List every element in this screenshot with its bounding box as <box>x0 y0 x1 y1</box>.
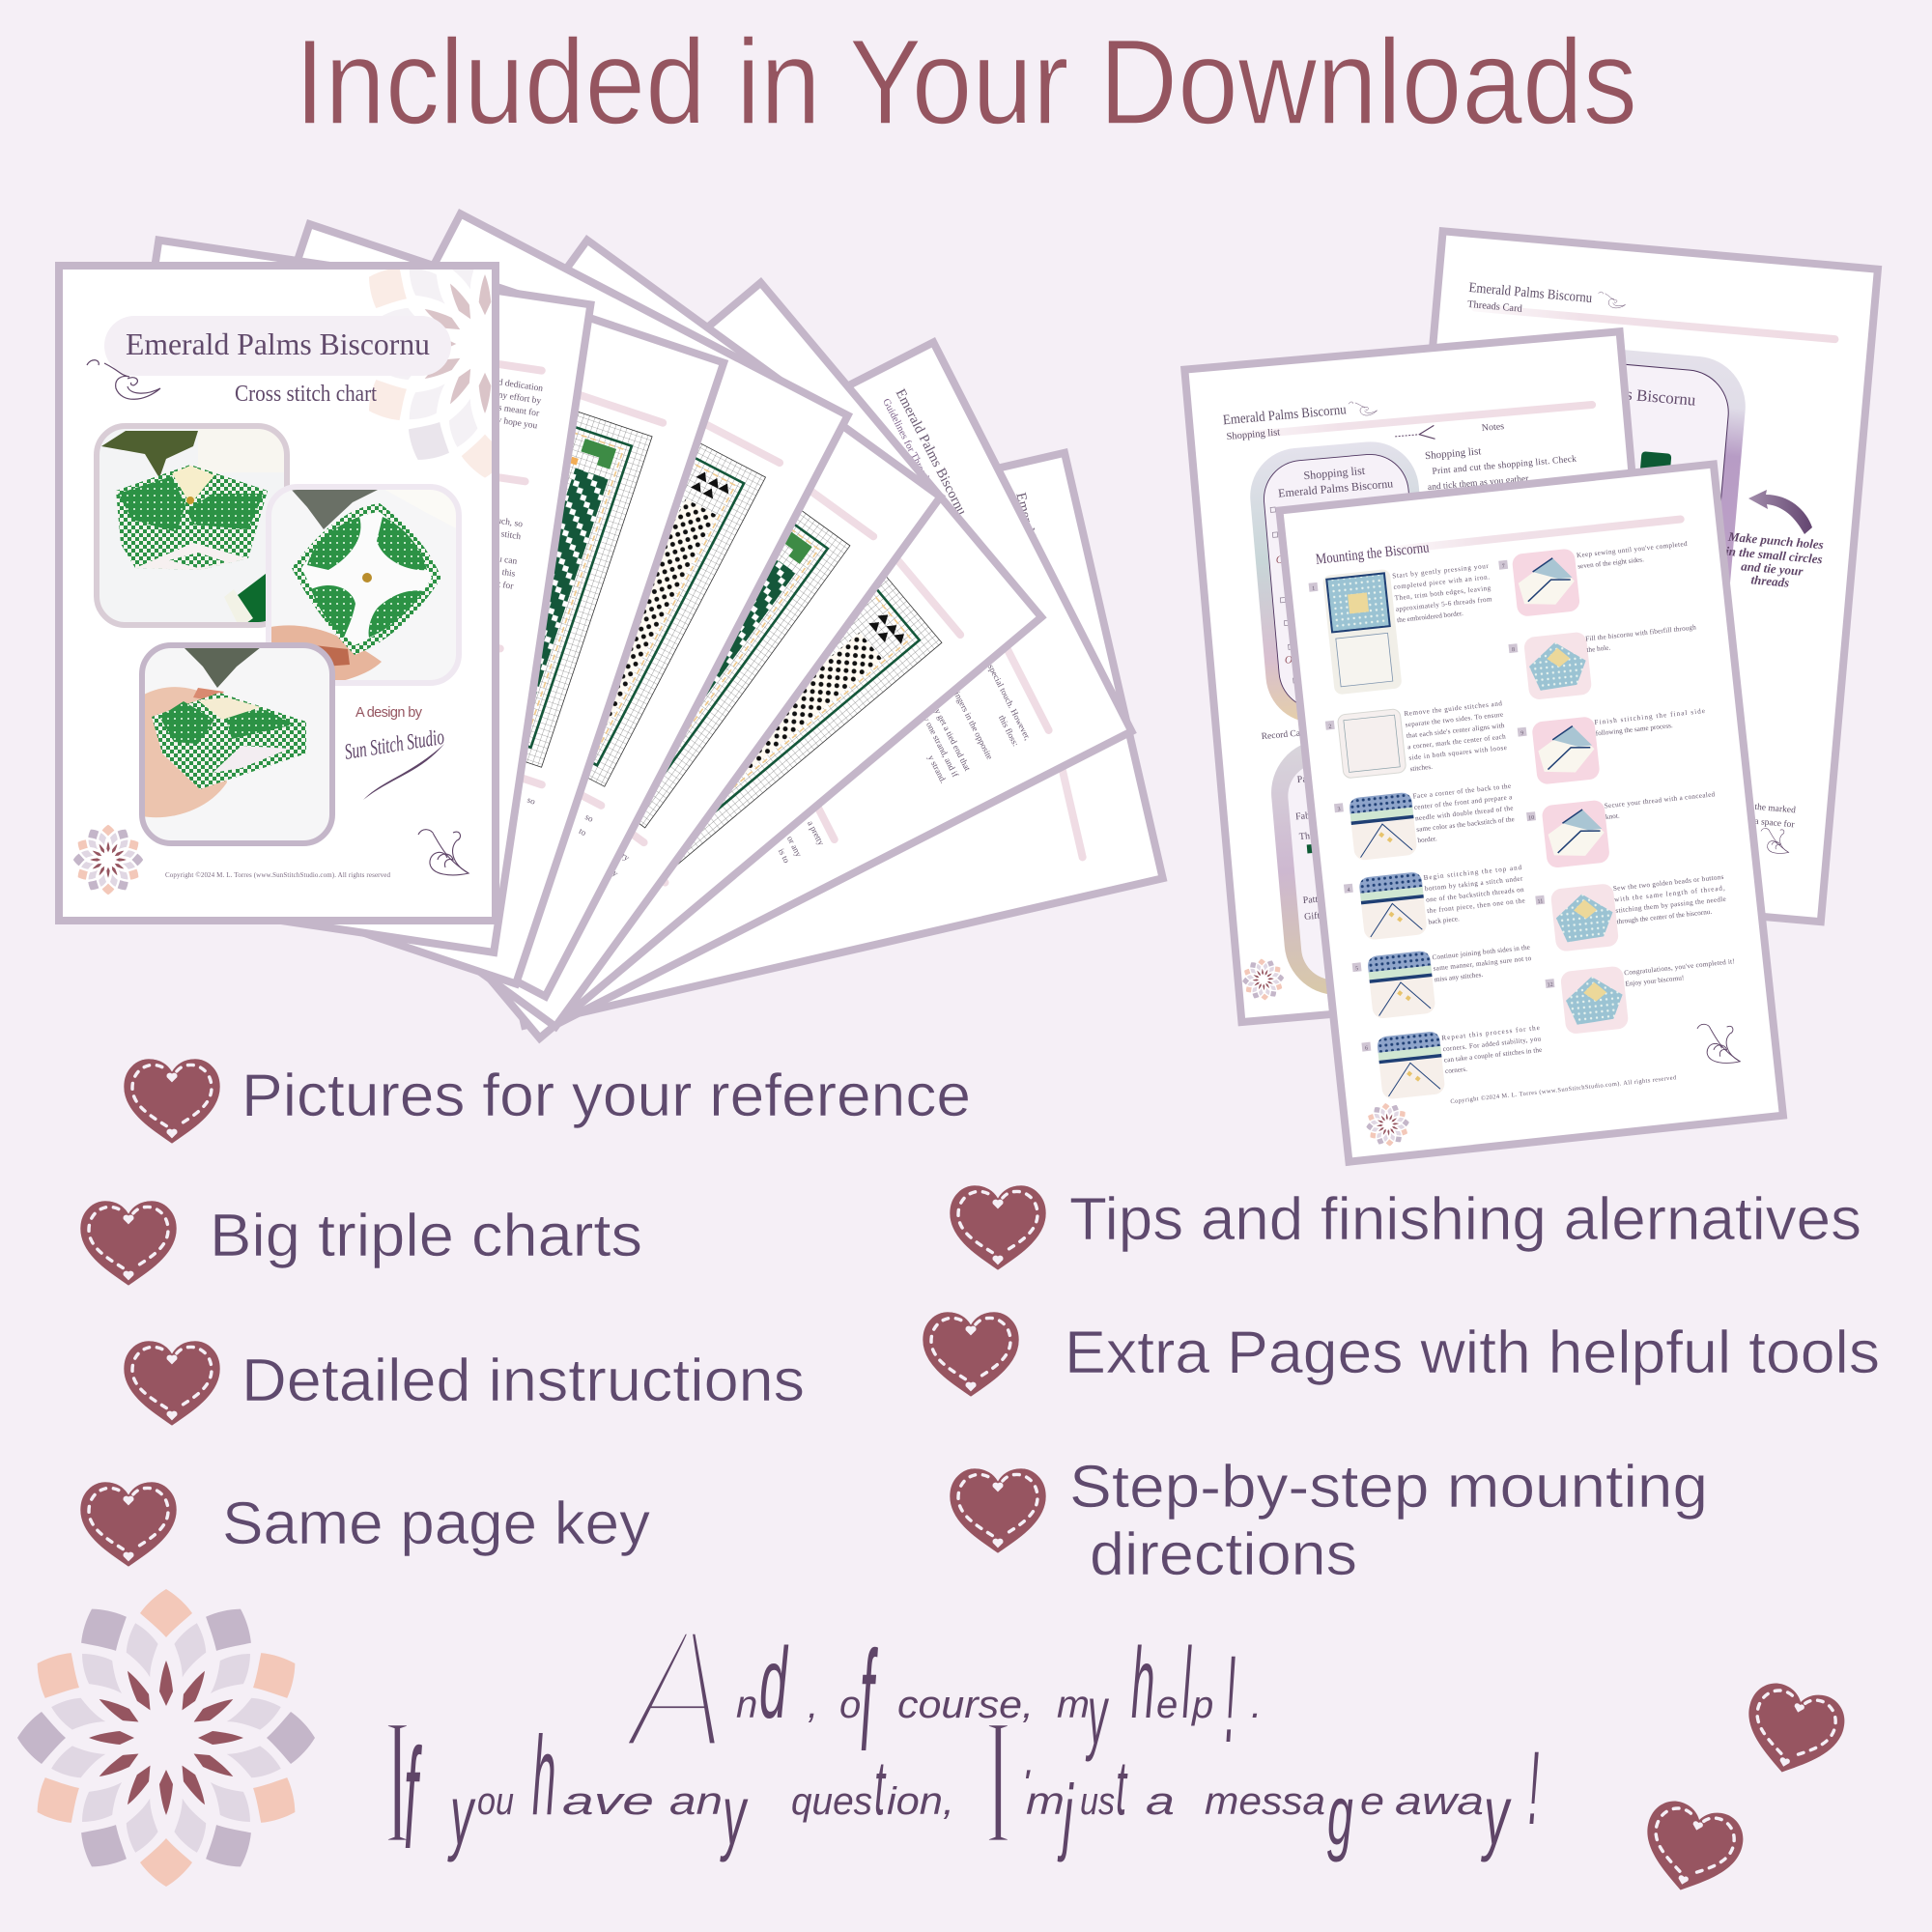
step 1: Then, trim both edges, leaving <box>1394 584 1492 602</box>
line 1: . <box>1251 1684 1262 1726</box>
page: green chart <box>202 241 941 1027</box>
page: welcome text page: is meant for <box>495 402 541 419</box>
line 2: t <box>874 1746 887 1832</box>
step 11: 11 <box>1537 898 1544 905</box>
line 2: ou <box>477 1780 514 1823</box>
line 2: y <box>720 1769 748 1863</box>
step 12 <box>1545 953 1741 1037</box>
page: black symbol chart: to <box>578 826 588 838</box>
line 2: m <box>1026 1780 1065 1823</box>
step 10: Secure your thread with a concealed <box>1604 790 1716 810</box>
step 8 <box>1508 619 1702 702</box>
page: black symbol chart: stitches <box>631 869 655 896</box>
cover subtitle: Cross stitch chart <box>235 382 377 407</box>
page: black symbol chart: the pattern <box>609 874 640 909</box>
panel: feature list right <box>923 1185 1880 1588</box>
step 1: Start by gently pressing your <box>1392 562 1490 580</box>
line 1: h <box>1131 1627 1154 1739</box>
step 3: center of the front and prepare a <box>1413 793 1513 811</box>
step 3 <box>1334 781 1518 863</box>
step 11: through the center of the biscornu. <box>1616 908 1713 925</box>
line 2: I <box>384 1681 411 1883</box>
script message <box>384 1592 1539 1883</box>
page: shopping list: Threads <box>1298 829 1331 842</box>
page: green chart: so <box>526 795 537 807</box>
step 7: 7 <box>1502 564 1505 570</box>
line 1: p <box>1191 1684 1213 1726</box>
page: shopping list: Pattern <box>1296 773 1325 785</box>
step 11: with the same length of thread, <box>1614 884 1725 903</box>
page: shopping list: Fabric: Zweigart evenweave 25 count, in white <box>1278 494 1415 515</box>
step 11 <box>1535 871 1730 953</box>
line 2: awa <box>1395 1780 1484 1823</box>
step 9: following the same process. <box>1595 722 1673 738</box>
step 5: 5 <box>1355 966 1359 972</box>
item: mounting <box>950 1454 1708 1588</box>
icon: small mandala <box>1364 1101 1411 1149</box>
page: shopping list: Shopping list <box>1425 445 1482 462</box>
page: black symbol chart: ern <box>574 937 588 952</box>
callout: punch holes note <box>1725 529 1824 590</box>
panel: feature list left <box>80 1059 971 1567</box>
step 4: 4 <box>1347 888 1350 894</box>
text: copyright: Copyright ©2024 M. L. Torres (www.SunStitchStudio.com). All rights reserved <box>1450 1074 1677 1105</box>
page: blank page far right: Emerald Palms Biscornu <box>1012 491 1059 630</box>
step 4 <box>1343 861 1528 942</box>
step 4: one of the backstitch threads on <box>1426 886 1524 904</box>
page: mounting the biscornu <box>1279 465 1783 1162</box>
icon: decorative heart <box>1735 1678 1851 1784</box>
line 1: course, <box>897 1684 1034 1726</box>
icon: flourish <box>1761 828 1789 853</box>
page: guidelines text page: is to <box>777 847 792 865</box>
item: charts: Big triple charts <box>210 1203 642 1269</box>
page: guidelines text page: y strand. <box>926 753 949 784</box>
line 1: n <box>736 1684 757 1726</box>
item: instructions: Detailed instructions <box>242 1348 805 1414</box>
page: welcome text page: stitch <box>500 529 522 542</box>
line 2: e <box>1360 1780 1384 1823</box>
step 2: stitches. <box>1409 763 1433 773</box>
line 2: f <box>404 1719 422 1879</box>
page: guidelines text page: fingers in the opposite <box>952 688 995 761</box>
page: guidelines text page: this floss: <box>997 714 1021 748</box>
page: shopping list <box>1184 331 1677 1022</box>
line 1: f <box>860 1622 878 1781</box>
page: green chart: any <box>604 864 620 879</box>
line 2: h <box>532 1714 555 1838</box>
page: green chart: every <box>610 843 632 863</box>
page: shopping list: and tick them as you gather <box>1428 474 1530 493</box>
step 2: separate the two sides. To ensure <box>1405 711 1504 728</box>
page: shopping list: Or <box>1275 554 1289 566</box>
step 4: bottom by taking a stitch under <box>1424 874 1523 893</box>
step 8: 8 <box>1512 647 1515 653</box>
line 1: d <box>759 1629 788 1740</box>
line 2: t <box>1116 1746 1128 1832</box>
line 2: messa <box>1205 1780 1325 1823</box>
line 2: ! <box>1528 1730 1539 1847</box>
step 9: 9 <box>1520 730 1524 737</box>
heading: mounting: Mounting the Biscornu <box>1315 539 1430 568</box>
page: guidelines text page: special touch. However, <box>986 663 1033 742</box>
page: guidelines text page: y get a tied end that <box>933 707 973 773</box>
item: extra pages: Extra Pages with helpful tools <box>1065 1320 1880 1386</box>
line 2 <box>384 1681 1539 1883</box>
step 1: approximately 5-6 threads from <box>1396 595 1492 613</box>
page: black symbol chart <box>158 213 848 996</box>
photo: biscornu side view <box>139 642 335 846</box>
item: charts <box>80 1201 642 1286</box>
step 4: Begin stitching the top and <box>1423 864 1522 882</box>
line 2: ave <box>562 1780 654 1823</box>
icon: small mandala <box>73 825 143 895</box>
page: threads card <box>1386 231 1878 922</box>
page: welcome text page: truly hope you <box>484 413 538 432</box>
item: key: Same page key <box>222 1491 650 1557</box>
page: welcome text page: my effort by <box>495 389 542 407</box>
line 2: an <box>669 1780 723 1823</box>
step 10: knot. <box>1605 811 1620 821</box>
title: Included in Your Downloads <box>295 15 1637 150</box>
step 6: 6 <box>1365 1045 1368 1052</box>
page: guidelines text page: Guidelines for Threads <box>880 397 932 485</box>
page: shopping list: Shopping list <box>1303 464 1366 482</box>
page: threads card: e a space for <box>1747 815 1796 830</box>
page: guidelines text page: Emerald Palms Biscornu <box>893 386 969 518</box>
step 8: the hole. <box>1586 643 1611 654</box>
icon: flourish <box>418 830 469 875</box>
panel: extras pages <box>1184 231 1878 1162</box>
step 9: Finish stitching the final side <box>1594 707 1705 726</box>
callout: punch holes note: and tie your <box>1741 558 1804 579</box>
page: shopping list: Pattern <box>1302 894 1330 906</box>
step 12: Enjoy your biscornu! <box>1625 974 1685 988</box>
step 6: Repeat this process for the <box>1441 1024 1540 1042</box>
page: shopping list: Emerald Palms Biscornu <box>1278 476 1394 500</box>
page: welcome text page: touch, so <box>489 515 524 529</box>
step 11: Sew the two golden beads or buttons <box>1613 873 1724 893</box>
page: black symbol chart: so <box>583 811 595 824</box>
icon: decorative heart <box>1634 1796 1749 1902</box>
step 1: 1 <box>1312 586 1316 592</box>
page: guidelines text page: y one strand, and if <box>922 715 960 779</box>
step 12: Congratulations, you've completed it! <box>1624 957 1735 977</box>
item: pictures: Pictures for your reference <box>242 1063 971 1129</box>
step 8: Fill the biscornu with fiberfill through <box>1585 623 1697 643</box>
page: welcome text page: and dedication <box>489 377 544 394</box>
page: threads card: Emerald Palms Biscornu <box>1468 280 1593 306</box>
step 6: corners. For added stability, you <box>1442 1035 1542 1053</box>
page: shopping list: Or <box>1284 654 1297 667</box>
step 10: 10 <box>1528 815 1535 821</box>
icon: flourish <box>1697 1024 1740 1063</box>
step 1: completed piece with an iron. <box>1393 573 1491 591</box>
step 4: the front piece, then one on the <box>1427 896 1525 915</box>
icon: faded mandala on cover <box>351 210 619 478</box>
page: shopping list: Gifted <box>1304 910 1329 923</box>
line 2: I <box>985 1681 1011 1883</box>
line 1: l <box>1182 1627 1192 1739</box>
step 2: a corner, mark the center of each <box>1407 732 1506 751</box>
step 6: can take a couple of stitches in the <box>1443 1046 1543 1065</box>
cover title pill: Emerald Palms Biscornu <box>126 327 430 361</box>
line 2: ' <box>1022 1763 1031 1805</box>
item: extra pages <box>923 1312 1880 1397</box>
callout: punch holes note: in the small circles <box>1725 544 1823 566</box>
step 5: Continue joining both sides in the <box>1432 944 1530 961</box>
line 2: a <box>1146 1780 1175 1823</box>
line 1: ! <box>1225 1631 1236 1769</box>
page: blank page far right <box>426 453 1163 1026</box>
step 7 <box>1498 536 1693 618</box>
text: a design by: A design by <box>355 705 423 721</box>
step 7: Keep sewing until you've completed <box>1577 540 1688 559</box>
photo: biscornu top view <box>94 423 293 628</box>
logo: Sun Stitch Studio signature: Sun Stitch Studio <box>343 724 446 764</box>
step 5: miss any stitches. <box>1434 971 1484 983</box>
panel: cover page <box>55 262 499 924</box>
page: shopping list: Record Card <box>1261 728 1309 742</box>
line 1: A <box>620 1592 728 1785</box>
page: welcome text page: it for <box>495 579 515 592</box>
step 3: needle with double thread of the <box>1415 805 1514 822</box>
step 9 <box>1517 704 1711 786</box>
callout: punch holes note: threads <box>1750 572 1790 590</box>
page: shopping list: Emerald Palms Biscornu <box>1222 402 1347 428</box>
text: copyright: Copyright ©2024 M. L. Torres (www.SunStitchStudio.com). All rights reserved <box>165 871 390 879</box>
page: threads card: in the marked <box>1745 802 1796 815</box>
page: shopping list: Print and cut the shopping list. Check <box>1432 455 1577 477</box>
step 2: 2 <box>1328 724 1332 730</box>
step 6 <box>1361 1020 1546 1101</box>
line 1: m <box>1057 1684 1090 1726</box>
icon: large mandala <box>17 1589 315 1887</box>
page: shopping list: Fabric <box>1295 810 1321 822</box>
icon: flourish <box>87 360 160 399</box>
line 2: g <box>1327 1769 1353 1863</box>
page: shopping list: Notes <box>1481 421 1505 434</box>
cover title pill <box>104 316 451 376</box>
page: black symbol chart <box>259 283 1041 1038</box>
arrow <box>1748 490 1812 534</box>
line 2: us <box>1080 1780 1115 1823</box>
step 2: Remove the guide stitches and <box>1404 699 1503 718</box>
page: guidelines text page: a pretty <box>806 819 826 847</box>
step 2 <box>1324 697 1509 781</box>
page: threads card: Emerald Palms Biscornu <box>1532 377 1697 410</box>
step 5 <box>1351 940 1536 1021</box>
line 1: e <box>1156 1684 1178 1726</box>
page: shopping list: Shopping list <box>1226 427 1281 442</box>
panel: fan of chart pages <box>59 210 1163 1038</box>
line 2: y <box>1480 1769 1512 1862</box>
logo: Sun Stitch Studio signature <box>343 724 446 800</box>
step 3: border. <box>1417 835 1437 844</box>
line 2: y <box>447 1769 475 1863</box>
step 4: back piece. <box>1428 915 1460 926</box>
line 2: j <box>1058 1769 1074 1863</box>
item: tips <box>950 1185 1861 1270</box>
step 2: side in both squares with loose <box>1408 744 1507 762</box>
callout: punch holes note: Make punch holes <box>1726 529 1824 552</box>
step 6: corners. <box>1445 1065 1468 1075</box>
line 2: ques <box>791 1780 872 1823</box>
step 3: same color as the backstitch of the <box>1416 815 1515 834</box>
step 2: that each side's center aligns with <box>1406 722 1505 740</box>
line 1: y <box>1086 1667 1109 1762</box>
item: key <box>80 1482 650 1567</box>
line 2: ion, <box>887 1780 954 1823</box>
page: guidelines text page <box>350 342 1131 1029</box>
line 1: , <box>808 1684 818 1726</box>
step 7: seven of the eight sides. <box>1577 555 1644 571</box>
item: instructions <box>124 1341 805 1426</box>
step 1: the embroidered border. <box>1397 610 1463 624</box>
photo: biscornu held in hand <box>266 484 462 687</box>
step 12: 12 <box>1547 982 1553 988</box>
item: pictures <box>124 1059 971 1144</box>
line 1 <box>620 1592 1262 1785</box>
step 1 <box>1308 558 1501 696</box>
page: guidelines text page: or any <box>785 835 804 859</box>
item: tips: Tips and finishing alernatives <box>1069 1186 1861 1253</box>
item: mounting: directions <box>1090 1521 1357 1588</box>
line 1: o <box>839 1684 861 1726</box>
page: welcome text page: this <box>501 568 516 580</box>
step 10 <box>1526 787 1721 870</box>
item: mounting: Step-by-step mounting <box>1069 1454 1708 1520</box>
page: welcome text page <box>62 241 590 952</box>
page: green chart <box>101 224 724 983</box>
step 3: Face a corner of the back to the <box>1412 782 1511 801</box>
step 11: stitching them by passing the needle <box>1615 895 1726 915</box>
step 5: same manner, making sure not to <box>1433 954 1532 973</box>
page: threads card: Threads Card <box>1467 299 1523 315</box>
step 3: 3 <box>1337 807 1341 812</box>
page: welcome text page: you can <box>488 554 518 567</box>
